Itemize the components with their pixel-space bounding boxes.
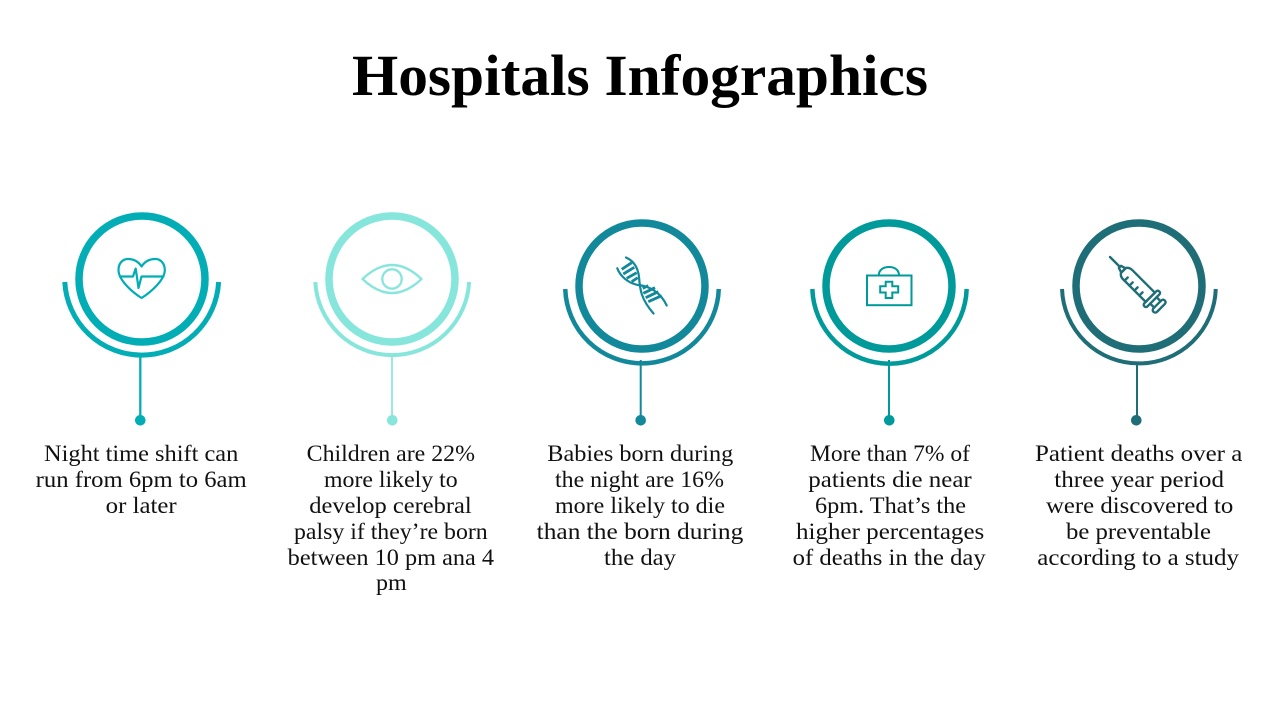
icon: heart with pulse (118, 259, 165, 298)
text: babies: Babies born during (547, 441, 734, 466)
cradle arc (315, 282, 469, 355)
connector (640, 360, 642, 420)
panel: children (288, 216, 495, 595)
connector dot (1131, 415, 1142, 426)
ring (79, 216, 205, 342)
text: deaths near 6pm: patients die near (808, 467, 972, 492)
text: night shift: or later (106, 493, 177, 518)
connector dot (635, 415, 646, 426)
cradle arc (1062, 289, 1216, 363)
text: night shift: Night time shift can (44, 441, 239, 466)
cradle arc (65, 282, 219, 355)
text: babies: than the born during (537, 519, 744, 544)
ring (1076, 223, 1202, 349)
panel: night shift (36, 216, 247, 518)
connector (139, 356, 141, 420)
text: deaths near 6pm: of deaths in the day (793, 545, 986, 570)
connector dot (135, 415, 146, 426)
ring (329, 216, 455, 342)
panel: preventable deaths (1035, 223, 1242, 570)
icon: eye (362, 265, 422, 293)
connector (888, 360, 890, 420)
text: preventable deaths: according to a study (1037, 545, 1240, 570)
text: night shift (36, 441, 247, 518)
text: babies: the day (604, 545, 677, 570)
text: children: between 10 pm ana 4 (288, 545, 495, 570)
text: preventable deaths: Patient deaths over a (1035, 441, 1242, 466)
panel: babies (537, 223, 744, 570)
text: deaths near 6pm: 6pm. That’s the (815, 493, 966, 518)
text: preventable deaths: were discovered to (1046, 493, 1233, 518)
text: preventable deaths: three year period (1054, 467, 1225, 492)
text: children: palsy if they’re born (294, 519, 488, 544)
icon: dna (617, 258, 667, 314)
text: night shift: run from 6pm to 6am (36, 467, 247, 492)
panel: deaths near 6pm (793, 223, 986, 570)
text: babies: the night are 16% (555, 467, 724, 492)
connector (391, 356, 393, 420)
text: children: develop cerebral (309, 493, 472, 518)
text: babies (537, 441, 744, 570)
text: babies: more likely to die (555, 493, 725, 518)
title: Hospitals Infographics (352, 43, 928, 108)
connector (1136, 364, 1138, 420)
ring (579, 223, 705, 349)
text: children: pm (376, 570, 407, 595)
text: deaths near 6pm: More than 7% of (810, 441, 970, 466)
text: children: Children are 22% (307, 441, 475, 466)
text: deaths near 6pm (793, 441, 986, 570)
text: children: more likely to (324, 467, 458, 492)
cradle arc (565, 289, 719, 363)
connector dot (387, 415, 398, 426)
icon: syringe (1103, 250, 1168, 315)
text: children (288, 441, 495, 595)
text: preventable deaths (1035, 441, 1242, 570)
text: deaths near 6pm: higher percentages (796, 519, 984, 544)
ring (826, 223, 952, 349)
cradle arc (812, 289, 967, 364)
connector dot (884, 415, 895, 426)
text: preventable deaths: be preventable (1066, 519, 1211, 544)
icon: first aid kit (867, 267, 912, 305)
